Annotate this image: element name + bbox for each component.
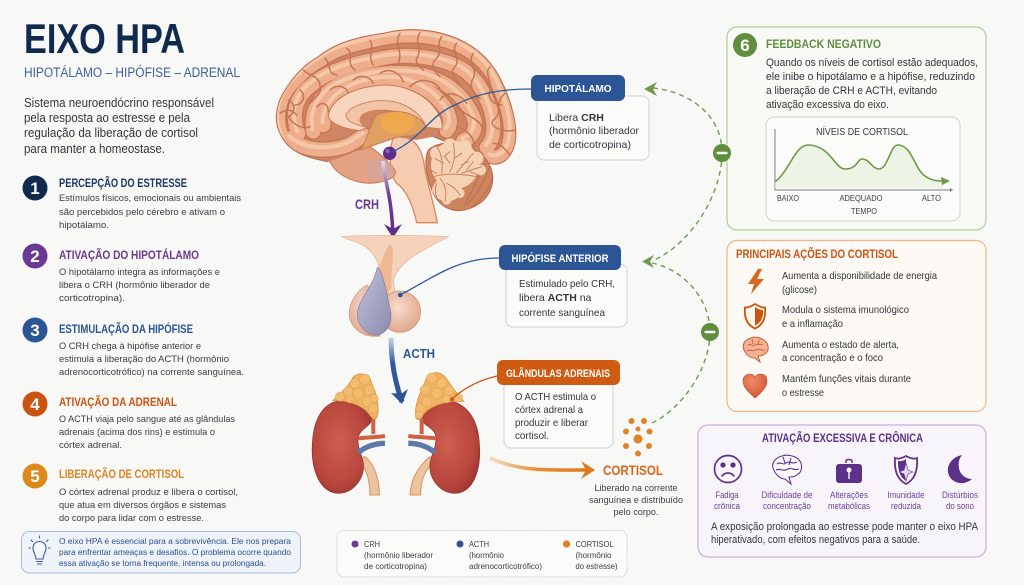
- illustration: brain sagittal section: [276, 30, 516, 223]
- text: funções vitais: [782, 373, 911, 399]
- text: exposição prolongada: A exposição prolongada ao estresse pode manter o eixo HPA: [711, 521, 979, 533]
- step 2: ativação do hipotálamo: 2: [30, 247, 40, 266]
- legend: adrenocorticotrófico): [469, 561, 542, 571]
- label: ACTH: ACTH: [403, 346, 435, 361]
- step 2: ativação do hipotálamo: corticotropina).: [59, 293, 125, 304]
- panel: feedback negativo: Quando os níveis de cortisol estão adequados,: [766, 57, 978, 69]
- legend: CRH: [364, 539, 380, 549]
- icon labels: crônica: [714, 501, 740, 511]
- text: funções vitais: o estresse: [782, 387, 824, 399]
- pointer dot: [450, 397, 454, 401]
- panel: feedback negativo: FEEDBACK NEGATIVO: [766, 39, 881, 51]
- callout: essencial para a sobrevivência: [22, 532, 300, 573]
- brainstem: [390, 136, 437, 223]
- step 4: ativação da adrenal: ATIVAÇÃO DA ADRENAL: [59, 396, 177, 409]
- step 4: ativação da adrenal: 4: [30, 395, 40, 414]
- panel: feedback negativo: 6: [740, 36, 750, 55]
- icon: moon: [948, 455, 972, 483]
- icon: cortisol molecules: [623, 418, 652, 456]
- intro text: [24, 96, 214, 156]
- step 2: ativação do hipotálamo: [22, 244, 220, 304]
- arrowhead: to hipófise: [642, 255, 654, 268]
- icon labels: Distúrbios: [942, 490, 978, 500]
- panel: feedback negativo: ele inibe o hipotálamo e a hipófise, reduzindo: [766, 71, 975, 83]
- connector: hipotálamo: [392, 89, 531, 152]
- hypothalamus marker: [383, 147, 396, 160]
- intro text: para manter a homeostase.: [24, 142, 165, 156]
- legend: (hormônio: [469, 550, 504, 560]
- step 5: liberação de cortisol: O córtex adrenal produz e libera o cortisol,: [59, 487, 238, 498]
- pointer dot: [398, 293, 403, 297]
- connector: hipófise: [400, 258, 499, 295]
- text: exposição prolongada: [711, 521, 979, 546]
- right kidney: [408, 401, 480, 495]
- text: imunológico: Modula o sistema imunológico: [782, 304, 909, 316]
- panel: principais ações do cortisol: PRINCIPAIS AÇÕES DO CORTISOL: [736, 248, 898, 261]
- cortical folds: [280, 33, 515, 157]
- legend: CORTISOL: [576, 539, 614, 549]
- label: glândulas adrenais: cortisol.: [515, 430, 549, 442]
- cerebrum outline: [276, 30, 516, 164]
- label: hipotálamo: HIPOTÁLAMO: [544, 82, 612, 95]
- icon labels: Imunidade: [888, 490, 924, 500]
- title: EIXO HPA: [24, 15, 185, 62]
- legend: de corticotropina): [364, 561, 427, 571]
- chart: níveis de cortisol: [766, 117, 960, 221]
- panel: ativação excessiva e crônica: ATIVAÇÃO EXCESSIVA E CRÔNICA: [762, 432, 923, 445]
- chart: níveis de cortisol: TEMPO: [851, 207, 877, 216]
- step 2: ativação do hipotálamo: ATIVAÇÃO DO HIPOTÁLAMO: [59, 249, 199, 262]
- label: glândulas adrenais: GLÂNDULAS ADRENAIS: [506, 367, 610, 380]
- panel: feedback negativo: ativação excessiva do eixo.: [766, 99, 889, 111]
- step 2: ativação do hipotálamo: libera o CRH (hormônio liberador de: [59, 280, 210, 291]
- icon: shield star: [895, 456, 917, 484]
- label: hipófise anterior: Estimulado pelo CRH,: [519, 278, 615, 290]
- step 5: liberação de cortisol: 5: [30, 467, 40, 486]
- step 5: liberação de cortisol: que atua em diversos órgãos e sistemas: [59, 500, 226, 511]
- legend: do estresse): [576, 561, 618, 571]
- step 1: percepção do estresse: PERCEPÇÃO DO ESTRESSE: [59, 177, 187, 190]
- text: exposição prolongada: hiperativado, com efeitos negativos para a saúde.: [711, 534, 920, 546]
- label: hipotálamo: [531, 75, 649, 160]
- intro text: Sistema neuroendócrino responsável: [24, 96, 214, 110]
- label: cortisol: [589, 462, 683, 518]
- step 1: percepção do estresse: são percebidos pelo cérebro e ativam o: [59, 207, 225, 218]
- step 3: estimulação da hipófise: [22, 318, 244, 378]
- anterior pituitary lobe: [379, 291, 421, 332]
- step 5: liberação de cortisol: [22, 464, 238, 524]
- feedback arrows: [652, 88, 722, 423]
- text: alerta: Aumenta o estado de alerta,: [782, 339, 899, 351]
- icon: metabolic case: [836, 460, 862, 483]
- icon labels: reduzida: [891, 501, 921, 511]
- icon labels: [714, 490, 978, 511]
- label: glândulas adrenais: [497, 360, 620, 448]
- step 5: liberação de cortisol: LIBERAÇÃO DE CORTISOL: [59, 468, 184, 481]
- legend: (hormônio: [576, 550, 612, 560]
- icon: brain outline: [773, 455, 802, 484]
- label: glândulas adrenais: córtex adrenal a: [515, 404, 583, 416]
- step 4: ativação da adrenal: córtex adrenal.: [59, 440, 122, 451]
- inhibition marker: [701, 323, 719, 341]
- text: alerta: a concentração e o foco: [782, 352, 883, 364]
- arrow: ACTH: [391, 338, 408, 404]
- step 4: ativação da adrenal: [22, 392, 235, 451]
- intro text: pela resposta ao estresse e pela: [24, 111, 190, 125]
- step 5: liberação de cortisol: do corpo para lidar com o estresse.: [59, 513, 204, 524]
- label: hipófise anterior: [499, 245, 627, 327]
- arrow: cortisol release: [490, 458, 595, 479]
- step 3: estimulação da hipófise: estimula a liberação do ACTH (hormônio: [59, 354, 229, 365]
- step 4: ativação da adrenal: adrenais (acima dos rins) e estimula o: [59, 427, 215, 438]
- step 4: ativação da adrenal: O ACTH viaja pelo sangue até as glândulas: [59, 414, 235, 425]
- icon: energy bolt: [748, 269, 764, 294]
- icon: brain: [743, 337, 768, 362]
- icon labels: concentração: [763, 501, 811, 511]
- text: alerta: [782, 339, 899, 364]
- inner arch: [346, 101, 426, 130]
- label: cortisol: Liberado na corrente: [594, 483, 678, 494]
- thalamus region: [360, 111, 426, 150]
- cerebrum base: [276, 30, 516, 164]
- label: hipófise anterior: corrente sanguínea: [519, 307, 605, 319]
- intro text: regulação da liberação de cortisol: [24, 126, 198, 140]
- panel: feedback negativo: a liberação de CRH e ACTH, evitando: [766, 85, 937, 97]
- icon: shield: [745, 304, 765, 328]
- icon: sad face: [714, 456, 742, 482]
- chart: níveis de cortisol: ADEQUADO: [840, 194, 882, 203]
- text: imunológico: e a inflamação: [782, 318, 843, 330]
- label: hipotálamo: Libera CRH: [549, 112, 604, 124]
- outer left lobe: [349, 285, 383, 336]
- panel: ativação excessiva e crônica: [698, 425, 986, 557]
- icon labels: do sono: [946, 501, 974, 511]
- posterior pituitary lobe: [357, 267, 391, 335]
- step 2: ativação do hipotálamo: O hipotálamo integra as informações e: [59, 267, 220, 278]
- label: glândulas adrenais: O ACTH estimula o: [515, 391, 596, 403]
- text: imunológico: [782, 304, 909, 330]
- step 3: estimulação da hipófise: adrenocorticotrófico) na corrente sanguínea.: [59, 367, 244, 378]
- icon labels: metabólicas: [828, 501, 870, 511]
- icon labels: Alterações: [830, 490, 868, 500]
- gyri bands: [277, 33, 511, 158]
- step 1: percepção do estresse: Estímulos físicos, emocionais ou ambientais: [59, 193, 241, 204]
- callout: essencial para a sobrevivência: O eixo HPA é essencial para a sobrevivência. Ele nos prepara: [59, 536, 291, 546]
- step 1: percepção do estresse: hipotálamo.: [59, 220, 109, 231]
- icon: heart: [743, 374, 767, 398]
- step 1: percepção do estresse: 1: [30, 179, 40, 198]
- callout: essencial para a sobrevivência: essa ativação se torna frequente, intensa ou prolongada.: [59, 558, 266, 568]
- left adrenal gland: [333, 374, 378, 419]
- callout: essencial para a sobrevivência: para enfrentar ameaças e desafios. O problema ocorre quando: [59, 547, 291, 557]
- label: cortisol: CORTISOL: [603, 462, 663, 478]
- illustration: pituitary and kidneys: [312, 235, 480, 495]
- step 1: percepção do estresse: [22, 176, 241, 231]
- label: glândulas adrenais: produzir e liberar: [515, 417, 588, 429]
- legend: [337, 530, 627, 577]
- label: hipófise anterior: libera ACTH na: [519, 292, 592, 304]
- cerebellum: [426, 143, 493, 211]
- step 3: estimulação da hipófise: 3: [30, 321, 40, 340]
- panel: principais ações do cortisol: [727, 240, 986, 412]
- subtitle: HIPOTÁLAMO – HIPÓFISE – ADRENAL: [24, 65, 240, 80]
- label: cortisol: pelo corpo.: [614, 507, 658, 518]
- corpus callosum: [328, 85, 442, 131]
- label: hipotálamo: de corticotropina): [549, 139, 631, 151]
- arrowhead: to hipotálamo: [644, 82, 657, 96]
- step 3: estimulação da hipófise: O CRH chega à hipófise anterior e: [59, 341, 201, 352]
- label: cortisol: sanguínea e distribuído: [589, 495, 683, 506]
- label: hipotálamo: (hormônio liberador: [549, 125, 639, 137]
- legend: (hormônio liberador: [364, 550, 433, 560]
- chart: níveis de cortisol: ALTO: [922, 194, 941, 203]
- connector: adrenal: [452, 376, 497, 399]
- text: energia: [782, 270, 937, 296]
- text: energia: (glicose): [782, 284, 817, 296]
- left kidney: [312, 401, 385, 495]
- text: funções vitais: Mantém funções vitais durante: [782, 373, 911, 385]
- label: CRH: CRH: [355, 196, 379, 212]
- chart: níveis de cortisol: NÍVEIS DE CORTISOL: [816, 125, 908, 138]
- right adrenal gland: [415, 373, 464, 420]
- arrow: CRH: [383, 161, 402, 238]
- inhibition marker: [713, 144, 731, 162]
- pituitary stalk: [342, 235, 448, 303]
- step 3: estimulação da hipófise: ESTIMULAÇÃO DA HIPÓFISE: [59, 323, 193, 336]
- label: hipófise anterior: HIPÓFISE ANTERIOR: [512, 252, 609, 265]
- temporal lobe: [328, 147, 395, 183]
- cerebellum striations: [463, 161, 493, 208]
- icon: light bulb: [29, 536, 50, 564]
- panel: feedback negativo: [727, 27, 986, 230]
- chart: níveis de cortisol: BAIXO: [777, 194, 799, 203]
- icon labels: Fadiga: [716, 490, 738, 500]
- icon labels: Dificuldade de: [762, 490, 812, 500]
- text: energia: Aumenta a disponibilidade de energia: [782, 270, 937, 282]
- legend: ACTH: [469, 539, 489, 549]
- arbor vitae: [430, 138, 486, 205]
